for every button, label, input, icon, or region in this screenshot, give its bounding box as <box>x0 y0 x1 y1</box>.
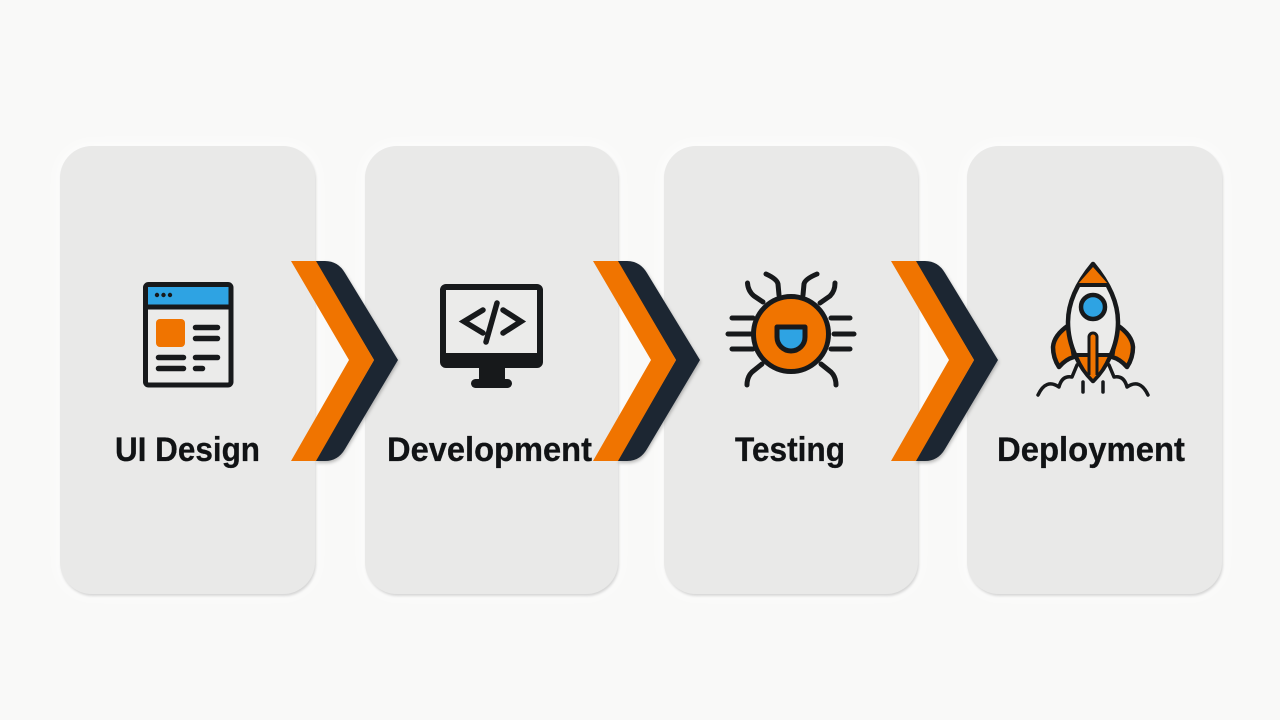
arrow: chevron 3 <box>891 261 998 461</box>
arrow: chevron 1 <box>291 261 398 461</box>
icon: rocket <box>1038 264 1148 395</box>
panel: Testing <box>664 146 918 594</box>
label: UI Design: UI Design <box>115 431 260 469</box>
panel: Deployment <box>967 146 1222 594</box>
icon: bug <box>728 274 854 385</box>
arrow: chevron 2 <box>593 261 700 461</box>
label: Development: Development <box>387 431 592 469</box>
label: Testing: Testing <box>735 431 845 469</box>
icon: code monitor <box>441 287 542 388</box>
panel: Development <box>365 146 618 594</box>
icon: browser window <box>146 284 231 385</box>
label: Deployment: Deployment <box>997 431 1185 469</box>
panel: UI Design <box>60 146 315 594</box>
